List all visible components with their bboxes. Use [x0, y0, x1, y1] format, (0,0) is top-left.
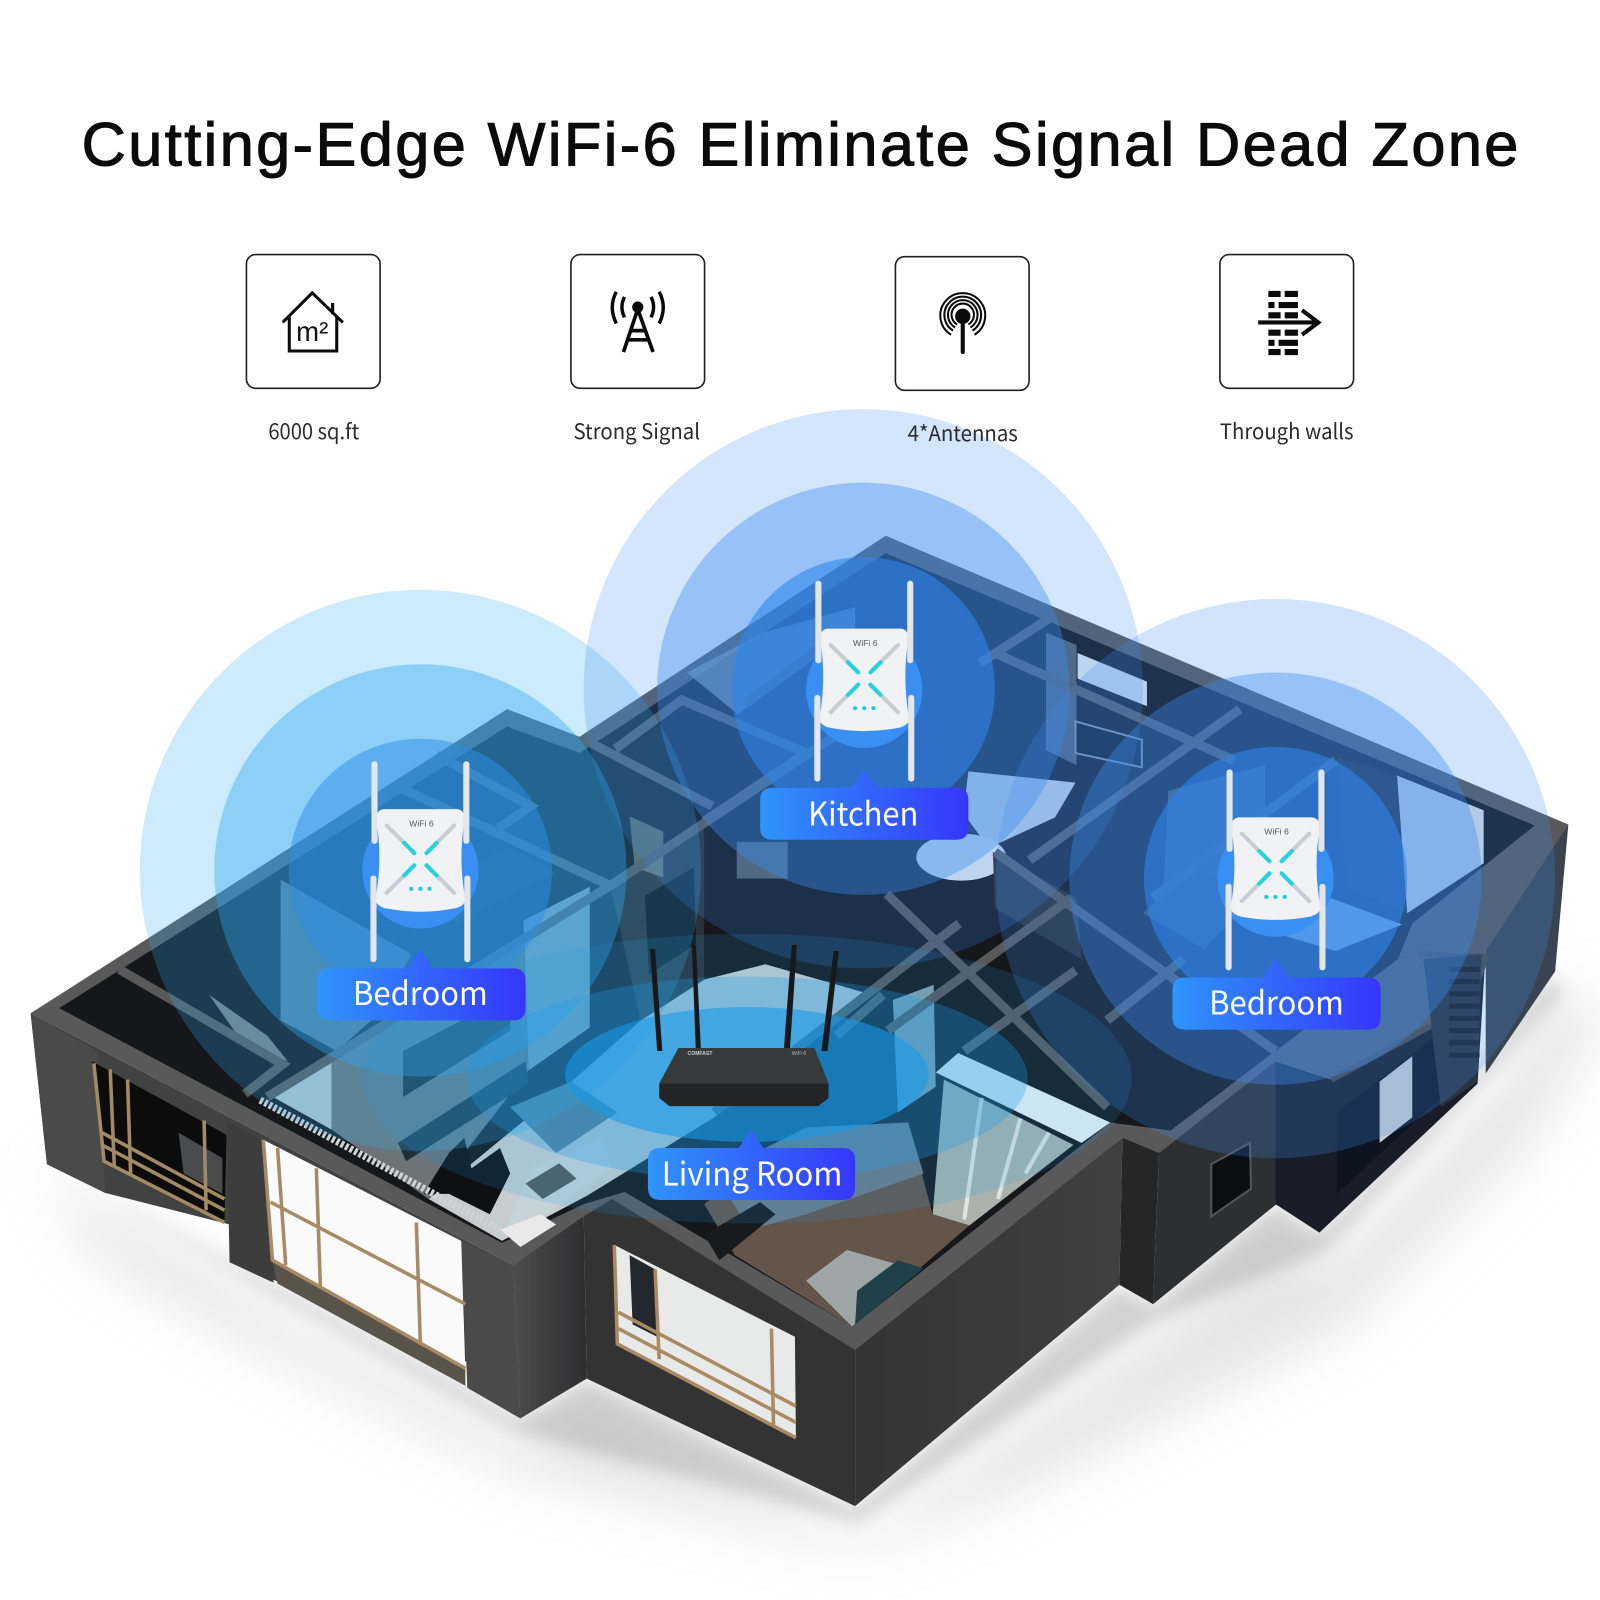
device: kitchen extender: WiFi 6	[853, 638, 878, 648]
wall top surface	[31, 536, 1568, 1350]
door wall face	[610, 829, 704, 1020]
right wardrobe	[523, 887, 590, 1070]
lower floor	[429, 964, 872, 1241]
callout: Bedroom right: Bedroom	[1209, 977, 1344, 1024]
device: router: COMFAST	[688, 1051, 713, 1057]
callout: Living Room: Living Room	[662, 1149, 842, 1196]
icon box: signal tower	[571, 255, 705, 388]
callout: Kitchen	[760, 769, 968, 840]
interior floor plan	[59, 553, 1535, 1327]
stove	[526, 1163, 577, 1199]
rug	[510, 1082, 617, 1153]
bedroom floor	[704, 1122, 969, 1327]
bay window	[1337, 954, 1482, 1194]
plant	[423, 1138, 510, 1214]
callout: Bedroom left	[317, 949, 526, 1020]
bedroom wardrobe	[281, 880, 411, 1051]
label: 6000 sq.ft	[268, 415, 359, 446]
device: router: WiFi 6	[792, 1051, 806, 1057]
device: left extender: WiFi 6	[409, 819, 434, 829]
small side window	[1211, 1143, 1251, 1216]
title: Cutting-Edge WiFi-6 Eliminate Signal Dead Zone	[82, 110, 1518, 178]
icon box: antenna	[895, 257, 1029, 390]
signal rings: right bedroom	[996, 599, 1555, 1158]
glass panel near wall	[267, 1056, 332, 1130]
device: right extender: WiFi 6	[1264, 827, 1289, 837]
signal rings: left bedroom	[140, 590, 701, 1151]
plant railing	[260, 1100, 500, 1230]
window 2	[263, 1140, 465, 1386]
left small room	[209, 995, 288, 1061]
curtain back	[1046, 633, 1077, 765]
counter and table	[963, 771, 1076, 848]
device: kitchen extender	[806, 584, 922, 779]
callout: Kitchen: Kitchen	[808, 789, 918, 836]
label: Strong Signal	[573, 415, 700, 446]
feature: through walls	[1220, 255, 1354, 446]
window 3	[614, 1245, 796, 1438]
wall lines	[119, 617, 1336, 1112]
icon box: house area: m²	[296, 316, 328, 347]
house cutaway	[31, 536, 1568, 1506]
icon box: house area	[246, 255, 380, 388]
signal rings: living room	[362, 934, 1132, 1223]
exterior wall faces	[31, 824, 1568, 1506]
balcony rail	[1076, 721, 1142, 767]
device: left extender	[362, 764, 479, 959]
callout: Bedroom right	[1172, 958, 1381, 1030]
door panel	[893, 985, 936, 1112]
label: 4*Antennas: 4*Antennas	[908, 417, 1018, 448]
window 1	[92, 1061, 227, 1222]
glass doors strip	[936, 1053, 1110, 1143]
feature: strong signal	[571, 255, 705, 446]
signal rings: kitchen	[584, 409, 1143, 968]
device: router	[650, 945, 839, 1106]
feature: antennas	[895, 257, 1029, 390]
label: Through walls	[1220, 415, 1354, 446]
glazed room floor	[687, 607, 855, 714]
tv wall and cabinet	[332, 934, 529, 1199]
kitchen counter	[505, 1138, 612, 1230]
ground shadow	[46, 974, 1600, 1551]
right bedroom curtains and floor	[1397, 776, 1484, 913]
dark block	[993, 852, 1082, 959]
feature: 6000 sq.ft	[246, 255, 380, 446]
callout: Bedroom left: Bedroom	[353, 968, 488, 1015]
icon box: wall with arrow	[1220, 255, 1354, 388]
back window	[1078, 653, 1147, 706]
callout: Living Room	[648, 1130, 855, 1200]
device: right extender	[1217, 772, 1334, 967]
